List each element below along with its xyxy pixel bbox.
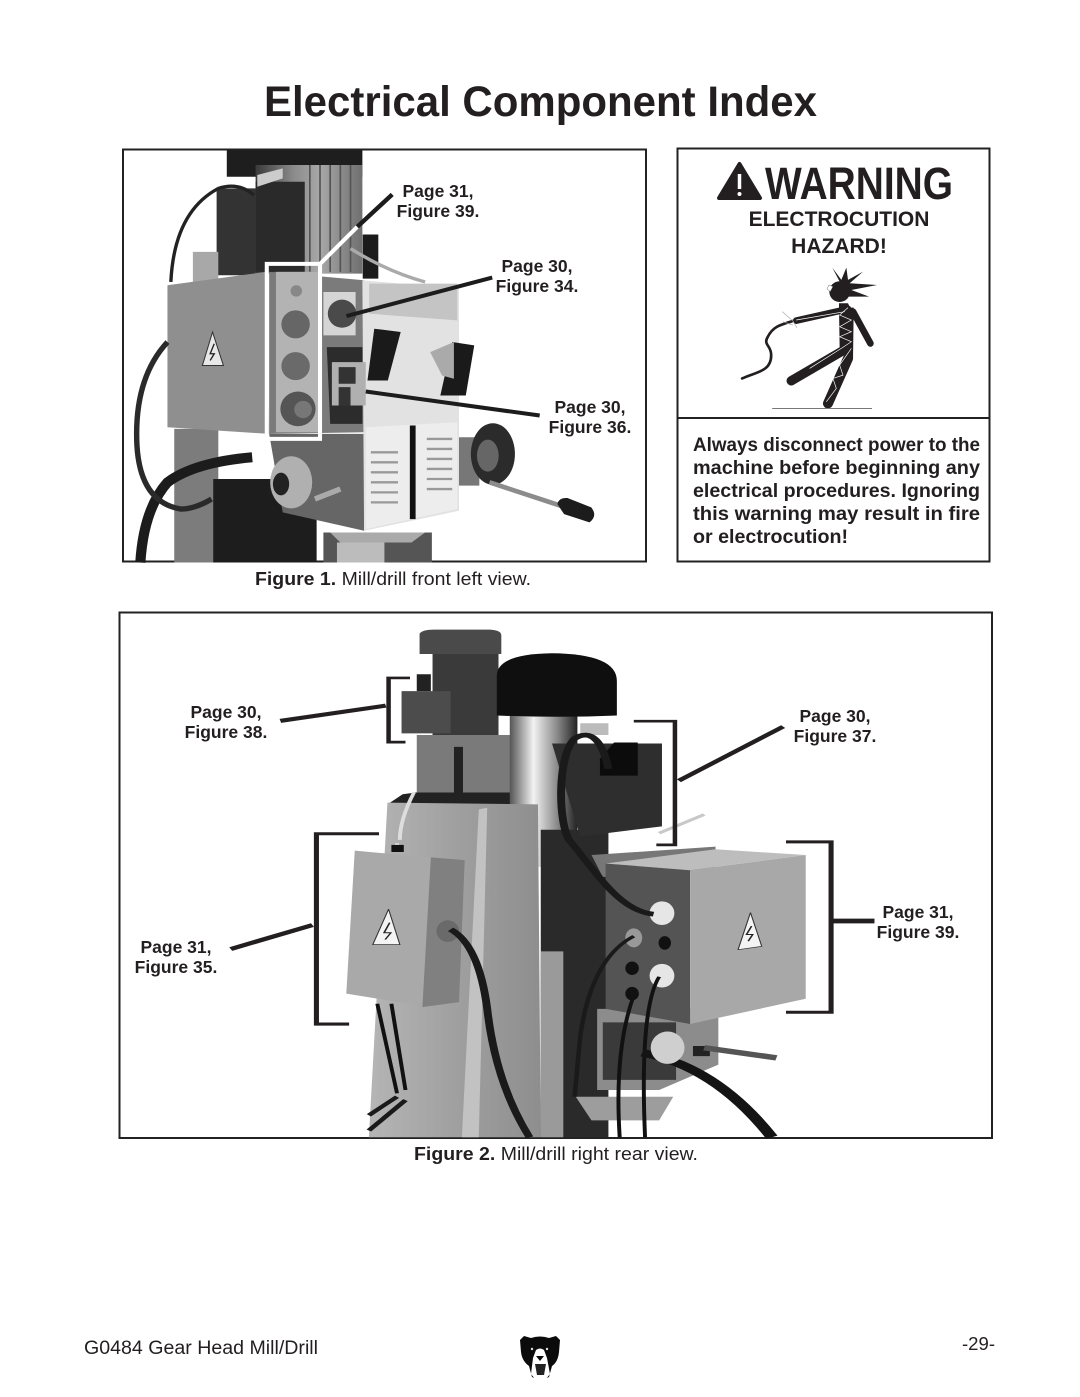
heading: electrocution hazard: HAZARD!	[791, 235, 887, 258]
footer: page number: -29-	[962, 1334, 995, 1354]
label: page 31 figure 39: Figure 39.	[397, 201, 479, 221]
footer: manual name: G0484 Gear Head Mill/Drill	[84, 1338, 318, 1359]
title: Electrical Component Index	[264, 78, 817, 126]
label: page 31 figure 39: Page 31,	[402, 181, 474, 201]
callout bracket: white box with leader	[267, 194, 392, 439]
label: page 31 figure 39: Figure 39.	[877, 922, 959, 942]
label: page 30 figure 34: Figure 34.	[496, 276, 578, 296]
leader line to figure 36	[366, 391, 540, 416]
label: page 30 figure 37: Figure 37.	[794, 726, 876, 746]
photo: mill/drill front left	[137, 150, 594, 562]
caption: figure 1: Figure 1. Mill/drill front left view.	[255, 568, 531, 589]
label: page 30 figure 36: Figure 36.	[549, 417, 631, 437]
label: page 30 figure 38: Page 30,	[190, 702, 262, 722]
photo: mill/drill right rear	[231, 630, 874, 1137]
panel: figure 2 mill/drill right rear view	[120, 612, 992, 1138]
label: page 30 figure 36: Page 30,	[554, 397, 626, 417]
callout bracket: figure 38	[280, 678, 410, 742]
label: page 30 figure 38: Figure 38.	[185, 722, 267, 742]
label: page 30 figure 34: Page 30,	[501, 256, 573, 276]
label: page 31 figure 35: Figure 35.	[135, 957, 217, 977]
warning text: machine before beginning any	[693, 457, 980, 479]
leader line to figure 34	[346, 278, 492, 316]
icon: bear logo	[520, 1336, 560, 1379]
heading: electrocution hazard: ELECTROCUTION	[749, 208, 929, 231]
label: page 31 figure 35: Page 31,	[140, 937, 212, 957]
caption: figure 2: Figure 2. Mill/drill right rear view.	[414, 1143, 698, 1164]
warning text: or electrocution!	[693, 526, 848, 548]
icon: warning triangle	[719, 164, 760, 198]
callout bracket: figure 37	[634, 721, 783, 845]
callout bracket: figure 35	[231, 834, 379, 1024]
icon: electrocuted figure	[742, 268, 877, 409]
label: page 30 figure 37: Page 30,	[799, 706, 871, 726]
callout bracket: figure 39	[786, 842, 874, 1012]
label: page 31 figure 39: Page 31,	[882, 902, 954, 922]
warning text: electrical procedures. Ignoring	[693, 480, 980, 502]
panel: warning	[677, 148, 990, 562]
warning text	[693, 434, 980, 548]
warning text: Always disconnect power to the	[693, 434, 980, 456]
warning text: this warning may result in fire	[693, 503, 980, 525]
panel: figure 1 mill/drill front left view	[123, 150, 646, 562]
heading: warning: WARNING	[765, 158, 953, 209]
